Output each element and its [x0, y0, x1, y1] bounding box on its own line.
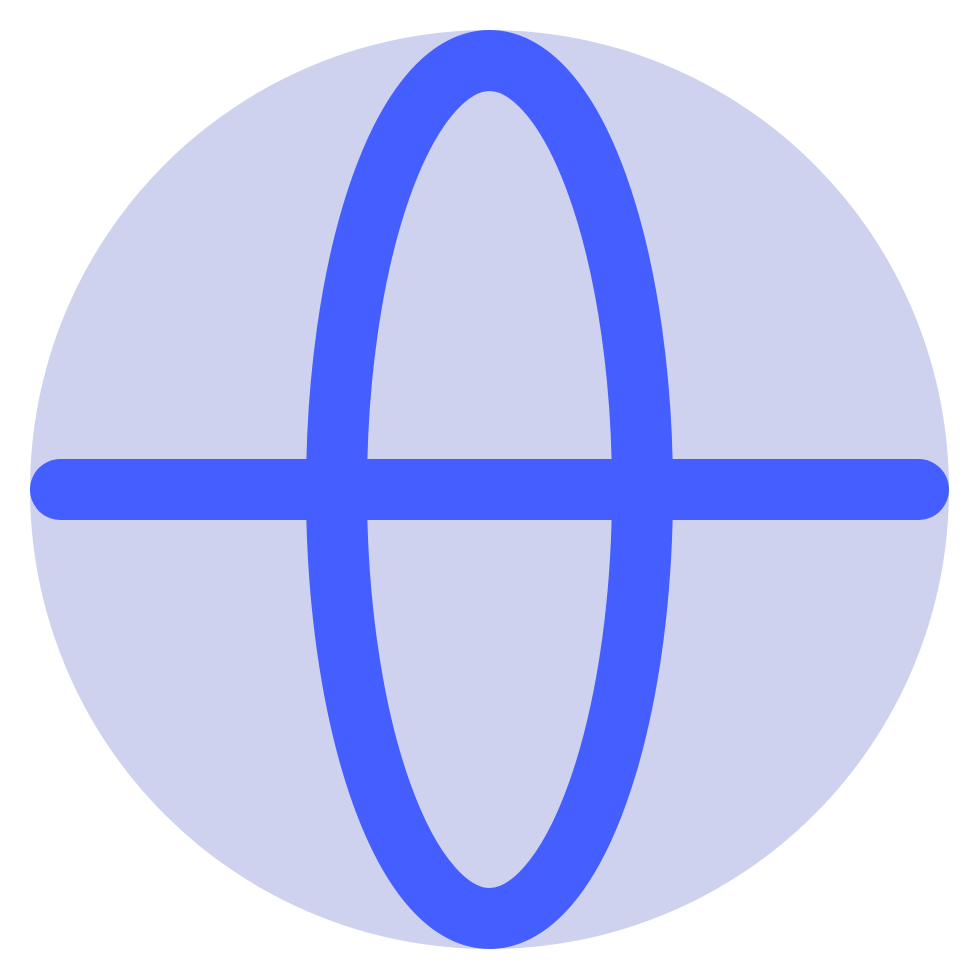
meridian ellipse: [336, 60, 642, 918]
equator line: [60, 459, 918, 520]
